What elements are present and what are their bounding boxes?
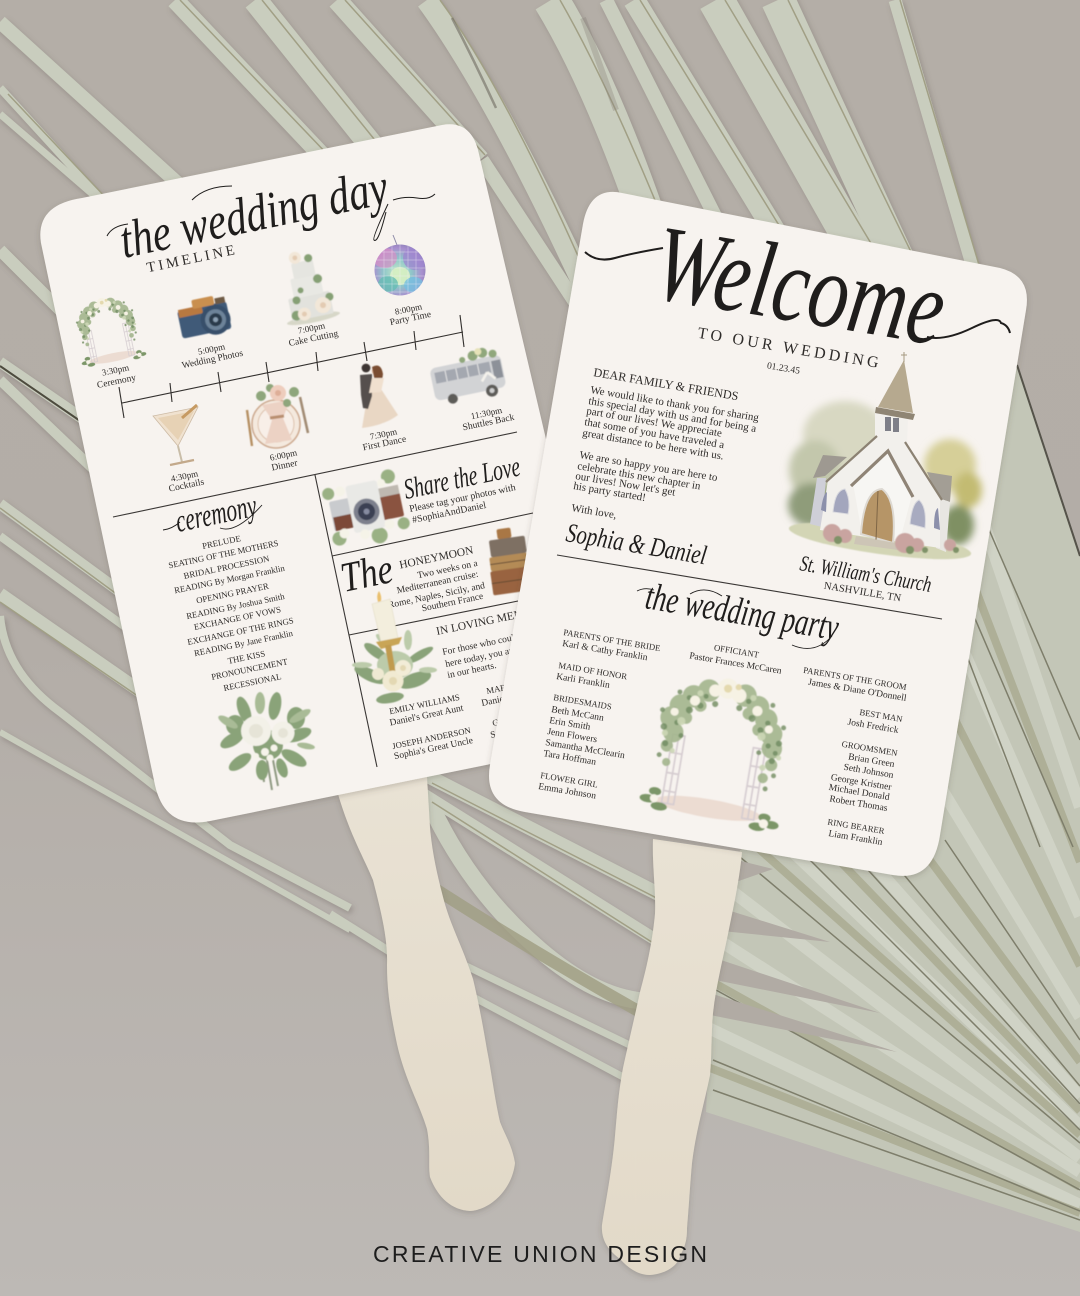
wedding party left column: Emma Johnson — [538, 782, 597, 802]
icon: camera — [175, 293, 233, 342]
letter: dear family and friends: DEAR FAMILY & FRIENDS — [593, 365, 740, 403]
brand credit: CREATIVE UNION DESIGN — [373, 1241, 707, 1267]
wedding party officiant: OFFICIANT — [713, 642, 760, 660]
timeline label: shuttles back: Shuttles Back — [462, 413, 516, 433]
timeline label: cake cutting: Cake Cutting — [288, 329, 340, 349]
ceremony list: PRELUDE — [201, 533, 242, 551]
wedding party left column: Samantha McClearin — [545, 738, 626, 761]
letter: dear family and friends: great distance to be here with us. — [582, 427, 725, 463]
timeline label: ceremony: 3:30pm — [101, 362, 130, 378]
heading: the honeymoon — [337, 544, 475, 602]
wedding party right column: RING BEARER — [827, 817, 886, 836]
wedding party left column: FLOWER GIRL — [540, 770, 599, 790]
wedding date: 01.23.45 — [766, 361, 801, 377]
memorial names: Daniel's Aunt — [481, 689, 533, 709]
icon: ceremony arch — [69, 291, 147, 370]
timeline label: first dance: 7:30pm — [369, 426, 398, 442]
panel: right fan welcome card — [489, 192, 1027, 876]
fan handle left — [338, 777, 515, 1211]
timeline label: ceremony: Ceremony — [96, 373, 137, 391]
timeline label: party time — [389, 301, 432, 328]
memorial names: EMILY WILLIAMS — [388, 692, 461, 716]
wedding party left column: Jenn Flowers — [547, 727, 598, 745]
illustration: white church — [787, 352, 982, 567]
wedding party right column: GROOMSMEN — [841, 739, 899, 758]
ceremony list: EXCHANGE OF THE RINGS — [186, 615, 295, 647]
fan handle right — [602, 839, 742, 1275]
illustration: floral arch — [637, 667, 801, 834]
icon: dinner plate — [247, 384, 308, 448]
timeline label: shuttles back: 11:30pm — [470, 405, 503, 421]
honeymoon details: Rome, Naples, Sicily, and — [387, 581, 486, 611]
wedding party left column: PARENTS OF THE BRIDE — [563, 627, 661, 653]
letter: dear family and friends: that some of you have traveled a — [584, 416, 725, 451]
letter: dear family and friends: With love, — [571, 502, 618, 522]
timeline label: cake cutting: 7:00pm — [297, 320, 326, 336]
wedding party right column: PARENTS OF THE GROOM — [803, 665, 908, 692]
timeline label: first dance — [362, 426, 407, 453]
wedding party right column: BEST MAN — [859, 707, 904, 724]
memorial message — [442, 628, 546, 681]
subheading: to our wedding: TO OUR WEDDING — [696, 325, 883, 372]
section dividers — [113, 432, 533, 767]
letter: dear family and friends — [571, 365, 760, 522]
icon: stacked suitcases — [484, 526, 533, 595]
divider — [557, 555, 942, 619]
icon: candle with flowers — [352, 591, 437, 705]
wedding party right column: Seth Johnson — [843, 763, 894, 781]
heading: in loving memory: IN LOVING MEMORY — [435, 603, 549, 638]
timeline label: party time: Party Time — [389, 310, 432, 328]
icon: dancing couple — [360, 364, 398, 428]
ceremony list: OPENING PRAYER — [195, 581, 270, 605]
memorial names: JOSEPH ANDERSON — [391, 725, 472, 751]
memorial names: Daniel's Great Aunt — [389, 703, 465, 729]
panel: the honeymoon — [337, 526, 533, 614]
panel: share the love — [320, 451, 523, 553]
icon: martini glass — [153, 405, 198, 465]
letter: dear family and friends: celebrate this new chapter in — [577, 460, 702, 493]
ceremony list: READING By Jane Franklin — [193, 628, 294, 658]
timeline label: first dance: First Dance — [362, 435, 407, 453]
icon: shuttle bus — [427, 344, 508, 408]
honeymoon details — [387, 559, 486, 614]
heading: the wedding party — [637, 575, 842, 649]
ceremony list: EXCHANGE OF VOWS — [193, 604, 282, 632]
honeymoon details: Mediterranean cruise: — [396, 570, 479, 596]
heading: share the love: Share the Love — [401, 451, 523, 506]
heading: the honeymoon: The — [337, 546, 397, 602]
wedding party right column: Josh Fredrick — [847, 718, 899, 736]
wedding party left column — [538, 627, 661, 802]
letter: dear family and friends: his party started! — [573, 480, 647, 504]
memorial names: Sophia's Great Uncle — [393, 736, 474, 762]
share message: #SophiaAndDaniel — [411, 500, 487, 526]
heading: ceremony: ceremony — [172, 487, 260, 539]
letter: dear family and friends: We are so happy you are here to — [579, 449, 719, 484]
heading: the honeymoon: HONEYMOON — [398, 544, 475, 572]
memorial names — [388, 675, 547, 762]
timeline label: wedding photos: Wedding Photos — [181, 349, 244, 371]
share message: Please tag your photos with — [408, 482, 517, 515]
venue location: NASHVILLE, TN — [823, 581, 902, 604]
ceremony list: RECESSIONAL — [223, 671, 282, 693]
heading: the wedding party: the wedding party — [643, 575, 842, 649]
memorial message: here today, you are always — [445, 640, 546, 670]
olive frond details — [0, 0, 985, 1012]
ceremony list: PRONOUNCEMENT — [210, 656, 289, 682]
heading: welcome: Welcome — [646, 203, 954, 369]
letter: dear family and friends: our lives! Now let's get — [575, 470, 676, 499]
wedding party left column: Karl & Cathy Franklin — [562, 639, 648, 663]
subheading: timeline: TIMELINE — [145, 242, 239, 276]
wedding party right column: George Kristner — [830, 773, 893, 793]
letter: dear family and friends: this special day with us and for being a — [588, 395, 757, 435]
palm fronds top and left — [0, 0, 978, 1086]
wedding party officiant: Pastor Frances McCaren — [688, 651, 782, 677]
timeline label: party time: 8:00pm — [394, 301, 423, 317]
timeline label: cocktails: Cocktails — [168, 477, 205, 495]
letter: dear family and friends: We would like to thank you for sharing — [590, 384, 760, 424]
memorial message: For those who couldn't be — [442, 628, 540, 658]
wedding party left column: BRIDESMAIDS — [553, 692, 613, 712]
wedding party right column: Liam Franklin — [828, 829, 883, 848]
memorial names: Sophia's Uncle — [490, 720, 547, 741]
panel: left fan timeline card — [40, 124, 565, 823]
honeymoon details: Two weeks on a — [417, 559, 479, 581]
venue name: st william's church: St. William's Church — [798, 550, 933, 597]
wedding party right column: Brian Green — [847, 752, 895, 770]
timeline label: cake cutting — [288, 320, 340, 349]
honeymoon details: Southern France — [421, 592, 484, 614]
wedding party right column — [803, 665, 908, 848]
wedding party right column: Michael Donald — [828, 783, 890, 803]
memorial message: in our hearts. — [447, 661, 497, 681]
timeline label: wedding photos: 5:00pm — [197, 341, 226, 357]
ceremony list: READING By Joshua Smith — [185, 591, 286, 621]
icon: disco ball — [373, 235, 427, 296]
ceremony list: BRIDAL PROCESSION — [183, 553, 271, 581]
panel: ceremony order — [163, 487, 315, 790]
palm fan lower right — [700, 365, 1080, 1232]
timeline label: ceremony — [96, 362, 137, 391]
ceremony list: READING By Morgan Franklin — [173, 563, 286, 595]
signature: sophia and daniel: Sophia & Daniel — [564, 517, 709, 570]
wedding party left column: Erin Smith — [549, 716, 591, 733]
panel: in loving memory — [352, 591, 549, 762]
icon: white bouquet — [216, 691, 315, 790]
timeline label: cocktails: 4:30pm — [170, 468, 199, 484]
heading: ceremony — [163, 487, 262, 539]
timeline label: cocktails — [168, 468, 205, 495]
ceremony list: THE KISS — [227, 648, 266, 666]
wedding party left column: Karli Franklin — [556, 672, 611, 691]
timeline label: dinner: Dinner — [271, 458, 299, 474]
memorial names: GEORGE — [491, 711, 528, 728]
ceremony list — [168, 533, 295, 693]
timeline label: dinner: 6:00pm — [269, 447, 298, 463]
wedding party right column: James & Diane O'Donnell — [807, 678, 908, 704]
wedding party left column: Tara Hoffman — [543, 748, 597, 768]
ceremony list: SEATING OF THE MOTHERS — [168, 538, 279, 570]
wedding party right column: Robert Thomas — [829, 794, 888, 814]
heading: the wedding day: the wedding day — [115, 159, 393, 270]
memorial names: MARY JONES — [485, 675, 540, 696]
icon: wedding cake — [273, 245, 341, 328]
letter: dear family and friends: part of our lives! We appreciate — [586, 405, 723, 440]
icon: vintage cameras with flowers — [320, 467, 413, 553]
wedding party left column: Beth McCann — [551, 705, 605, 724]
timeline axis — [119, 315, 464, 418]
timeline label: dinner — [269, 447, 299, 474]
wedding party left column: MAID OF HONOR — [558, 660, 628, 681]
